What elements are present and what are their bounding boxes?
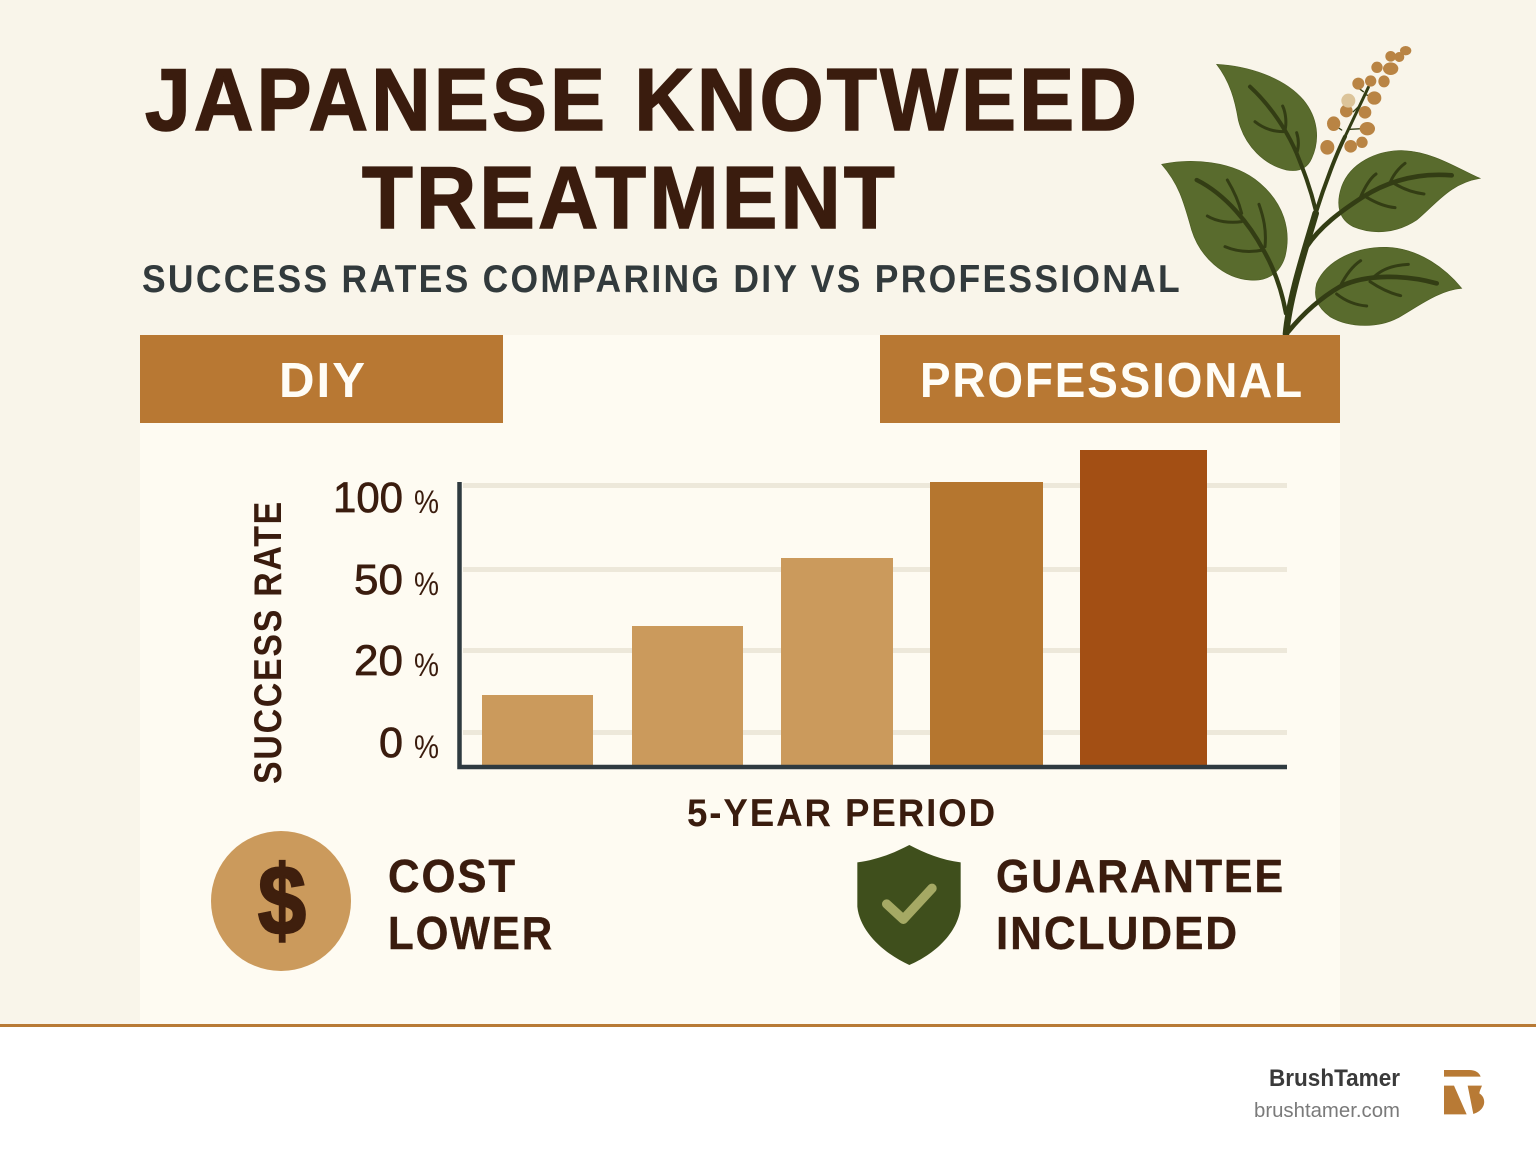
footer (0, 1024, 1536, 1154)
y-axis tick labels: 0 (379, 719, 403, 767)
text: cost lower: COST (388, 850, 517, 902)
bar chart (247, 450, 1287, 835)
y-axis tick labels: 100 (333, 474, 403, 522)
title (145, 50, 1140, 247)
subtitle: SUCCESS RATES COMPARING DIY VS PROFESSIONAL (142, 258, 1182, 301)
x-axis title: 5-YEAR PERIOD (687, 792, 997, 835)
y-axis tick labels: % (414, 729, 439, 765)
title: JAPANESE KNOTWEED (145, 50, 1140, 149)
header: Professional (880, 335, 1340, 423)
footer brand text: brushtamer.com (1254, 1100, 1400, 1122)
y-axis tick labels: 50 (354, 556, 403, 604)
icon: shield check (857, 845, 961, 965)
bars (482, 450, 1207, 766)
text: guarantee included (996, 850, 1285, 959)
y-axis tick labels: % (414, 484, 439, 520)
y-axis tick labels: % (414, 647, 439, 683)
header: DIY: DIY (279, 354, 367, 408)
header: Professional: PROFESSIONAL (920, 354, 1304, 408)
y-axis tick labels: 20 (354, 637, 403, 685)
footer brand text: BrushTamer (1269, 1065, 1400, 1092)
title: TREATMENT (362, 148, 898, 247)
y-axis tick labels (333, 474, 439, 767)
text: cost lower: LOWER (388, 907, 554, 959)
icon: dollar coin (211, 831, 351, 971)
icon: knotweed plant (1162, 46, 1480, 334)
icon: logo (1444, 1070, 1484, 1114)
text: cost lower (388, 850, 554, 959)
icon: dollar coin: $ (258, 845, 306, 955)
header: DIY (140, 335, 503, 423)
panel: chart card (140, 335, 1340, 1025)
axes (460, 482, 1287, 767)
y-axis tick labels: % (414, 566, 439, 602)
y-axis title: SUCCESS RATE (247, 500, 290, 784)
text: guarantee included: GUARANTEE (996, 850, 1285, 902)
footer brand text (1254, 1065, 1400, 1122)
text: guarantee included: INCLUDED (996, 907, 1239, 959)
